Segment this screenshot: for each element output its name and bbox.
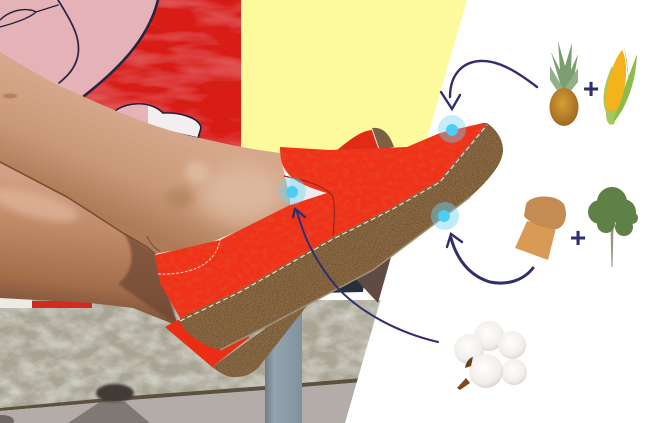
icon: champagne cork <box>515 196 566 260</box>
lower leg <box>0 160 178 326</box>
far shoe: lower sole and upper <box>165 293 317 377</box>
skin shading <box>0 94 282 254</box>
mural: white cloud <box>114 104 201 138</box>
near shoe: red leather upper <box>155 123 487 318</box>
pineapple leaves <box>550 41 578 92</box>
near shoe: white insole <box>290 176 327 205</box>
lower leg shading <box>0 182 178 326</box>
upper leg and foot <box>0 52 292 254</box>
metal pole <box>265 310 302 423</box>
white diagonal panel <box>345 0 650 423</box>
dark joint line <box>0 375 400 411</box>
concrete wall <box>0 300 400 408</box>
mural: dark outlines <box>0 0 158 96</box>
pavement <box>0 379 400 423</box>
plus sign 2: + <box>570 222 586 253</box>
white and red strip behind legs <box>0 297 92 308</box>
mural: pink figure <box>0 0 158 97</box>
plus sign 1: + <box>583 73 599 104</box>
marker dot: sole <box>431 202 459 230</box>
arrow: pineapple and corn to upper <box>441 61 537 109</box>
icon: corn <box>604 45 637 125</box>
shadow on pavement <box>0 384 150 423</box>
mural: red paint <box>0 0 241 170</box>
marker dot: toe <box>438 115 466 143</box>
icon: cotton boll <box>454 321 527 390</box>
icon: tree <box>588 187 638 267</box>
icon: pineapple <box>550 41 578 126</box>
photo panel clipped by the diagonal <box>0 0 467 423</box>
husk <box>604 66 622 125</box>
near shoe: cork sole <box>180 123 503 350</box>
pineapple body <box>550 88 578 126</box>
far shoe: toe cap behind <box>337 128 394 150</box>
arrow: cork and tree to sole <box>447 234 533 283</box>
arrow: cotton to lining <box>293 209 438 342</box>
cob <box>605 50 626 111</box>
yellow block <box>241 0 467 160</box>
dark bench parts <box>318 250 393 303</box>
marker dot: heel lining <box>278 177 306 205</box>
